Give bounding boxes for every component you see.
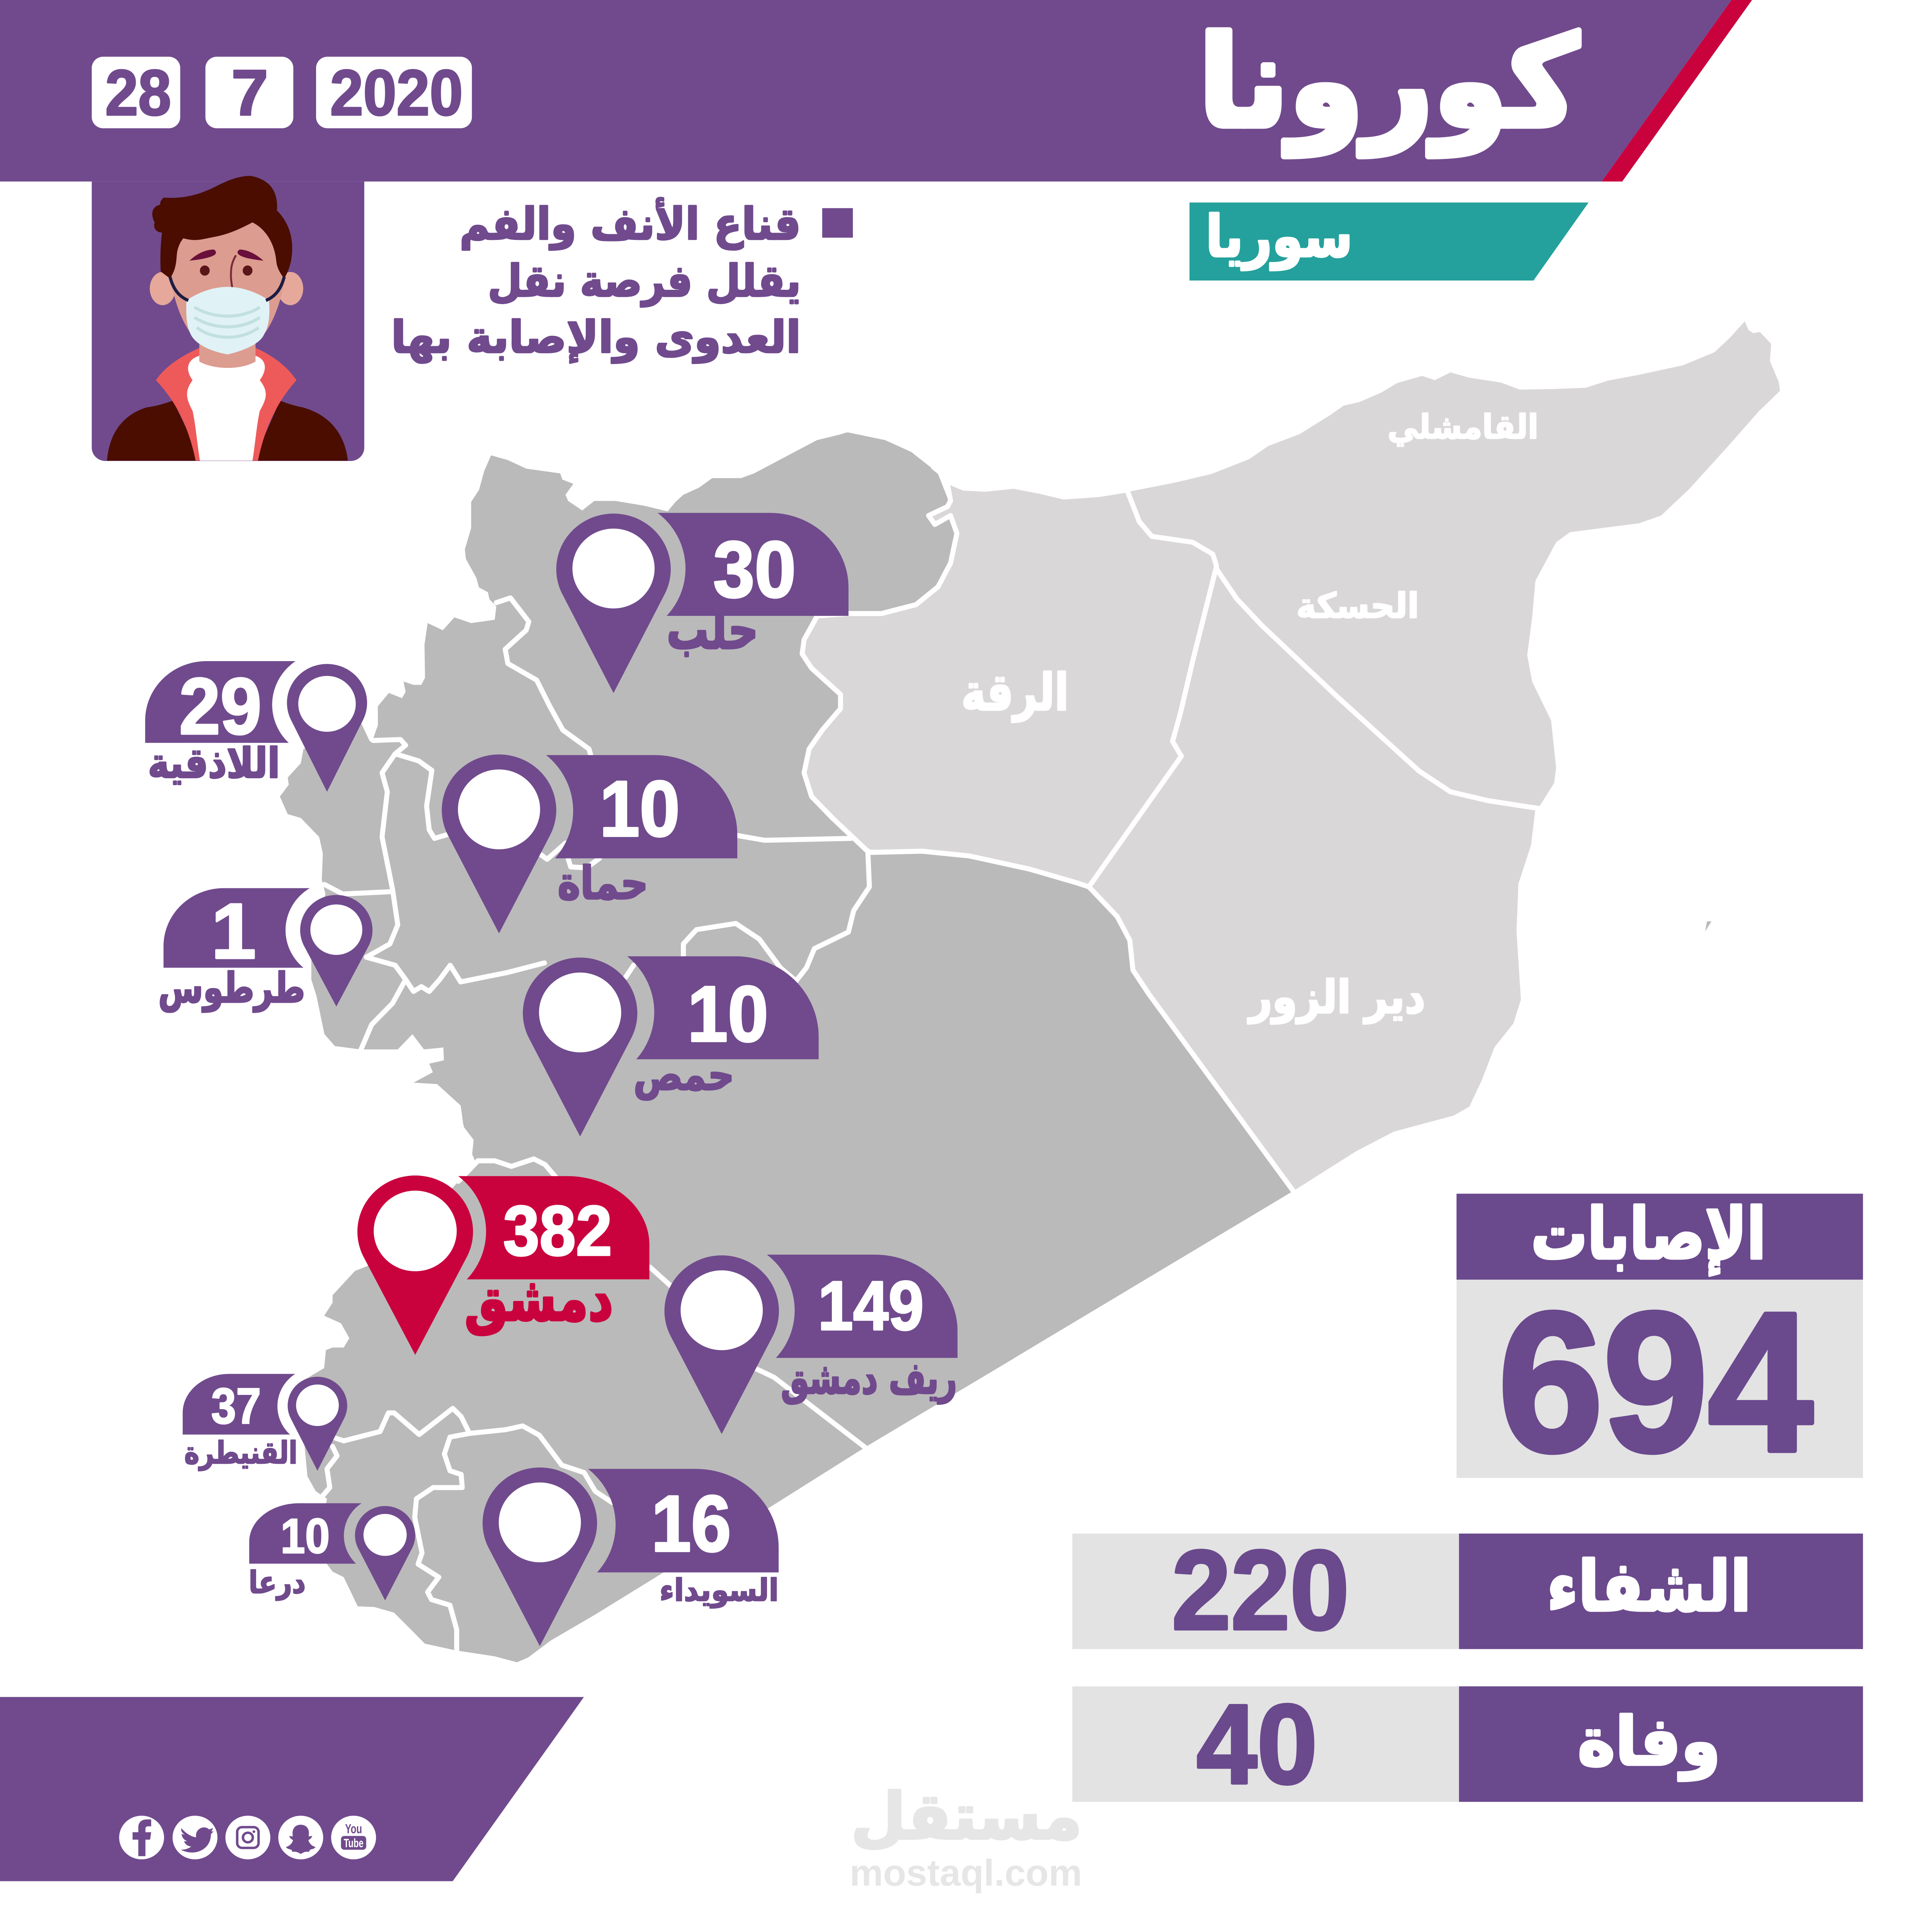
marker: Aleppo: 30 — [713, 525, 796, 614]
watermark latin: mostaql.com — [850, 1852, 1082, 1894]
deaths label: وفاة — [1578, 1703, 1721, 1781]
panel: total cases — [1456, 1193, 1863, 1493]
bullet — [822, 208, 853, 238]
icon: youtube: You — [345, 1821, 362, 1836]
region label: Qamishli: القامشلي — [1388, 408, 1538, 447]
map: eastern governorates — [802, 321, 1780, 1191]
marker: Aleppo: حلب — [667, 599, 759, 661]
marker: Latakia: 29 — [179, 662, 262, 751]
marker: Damascus — [357, 1175, 650, 1355]
marker: Sweida — [483, 1468, 779, 1646]
advice line 1: قناع الأنف والفم — [459, 197, 801, 250]
marker: Tartus: طرطوس — [158, 964, 305, 1012]
icon: twitter — [173, 1816, 218, 1859]
marker: Hama: 10 — [600, 764, 680, 853]
marker: Hama — [442, 755, 737, 934]
recovered number: 220 — [1172, 1527, 1349, 1653]
recovered label: الشفاء — [1547, 1546, 1751, 1627]
social icons — [119, 1816, 376, 1859]
region label: Deir ez-Zor: دير الزور — [1248, 971, 1425, 1024]
marker: Daraa: 10 — [281, 1509, 330, 1564]
advice line 2: يقلل فرصة نقل — [488, 256, 801, 307]
marker: Daraa: درعا — [249, 1565, 306, 1600]
date: month — [206, 56, 293, 129]
panel: man wearing mask — [92, 176, 364, 461]
icon: instagram — [225, 1816, 270, 1859]
map: western governorates — [280, 432, 1295, 1662]
title: كورونا — [1198, 9, 1580, 157]
marker: Rif Dimashq: 149 — [818, 1267, 924, 1345]
advice line 3: العدوى والإصابة بها — [391, 312, 801, 364]
header red stripe — [1602, 0, 1752, 182]
marker: Homs: 10 — [687, 969, 768, 1058]
marker: Rif Dimashq: ريف دمشق — [781, 1353, 957, 1404]
marker: Homs — [523, 956, 819, 1136]
map: southern border lines — [317, 1159, 866, 1651]
marker: Tartus: 1 — [211, 887, 256, 975]
subtitle: سوريا — [1206, 204, 1353, 270]
icon: snapchat — [278, 1816, 323, 1859]
marker: Quneitra — [183, 1374, 347, 1471]
marker: Aleppo — [556, 513, 849, 693]
marker: Damascus: دمشق — [464, 1264, 613, 1335]
map of Syria — [280, 321, 1780, 1662]
watermark — [850, 1779, 1082, 1894]
marker: Daraa — [249, 1503, 415, 1600]
illustration: man — [107, 176, 348, 461]
date: day: 28 — [105, 56, 171, 129]
icon: youtube: Tube — [344, 1836, 364, 1850]
marker: Damascus: 382 — [503, 1192, 612, 1270]
header band — [0, 0, 1731, 182]
region label: Hasakah: الحسكة — [1296, 586, 1419, 626]
marker: Tartus — [158, 887, 372, 1012]
panel: recovered — [1072, 1527, 1863, 1653]
subtitle ribbon — [1189, 202, 1588, 281]
icon: facebook — [119, 1816, 164, 1859]
marker: Sweida: السويداء — [660, 1572, 779, 1608]
total cases label: الإصابات — [1531, 1193, 1766, 1276]
marker: Homs: حمص — [633, 1050, 734, 1100]
marker: Hama: حماة — [558, 857, 648, 910]
date: year: 2020 — [330, 56, 463, 129]
region label: Raqqa: الرقة — [961, 663, 1069, 723]
panel: deaths — [1072, 1681, 1863, 1807]
advice text — [391, 197, 853, 364]
footer band — [0, 1697, 584, 1881]
marker: Quneitra: 37 — [211, 1378, 261, 1434]
date: month: 7 — [231, 56, 268, 129]
icon: youtube — [331, 1816, 376, 1859]
marker: Latakia: اللاذقية — [148, 739, 280, 787]
marker: Quneitra: القنيطرة — [184, 1435, 298, 1471]
marker: Latakia — [145, 661, 367, 792]
deaths number: 40 — [1197, 1681, 1317, 1807]
marker: Sweida: 16 — [651, 1479, 731, 1568]
map: northern border lines — [325, 598, 869, 1049]
total cases number: 694 — [1498, 1272, 1814, 1493]
marker: Rif Dimashq — [665, 1255, 957, 1434]
watermark arabic: مستقل — [851, 1779, 1082, 1854]
